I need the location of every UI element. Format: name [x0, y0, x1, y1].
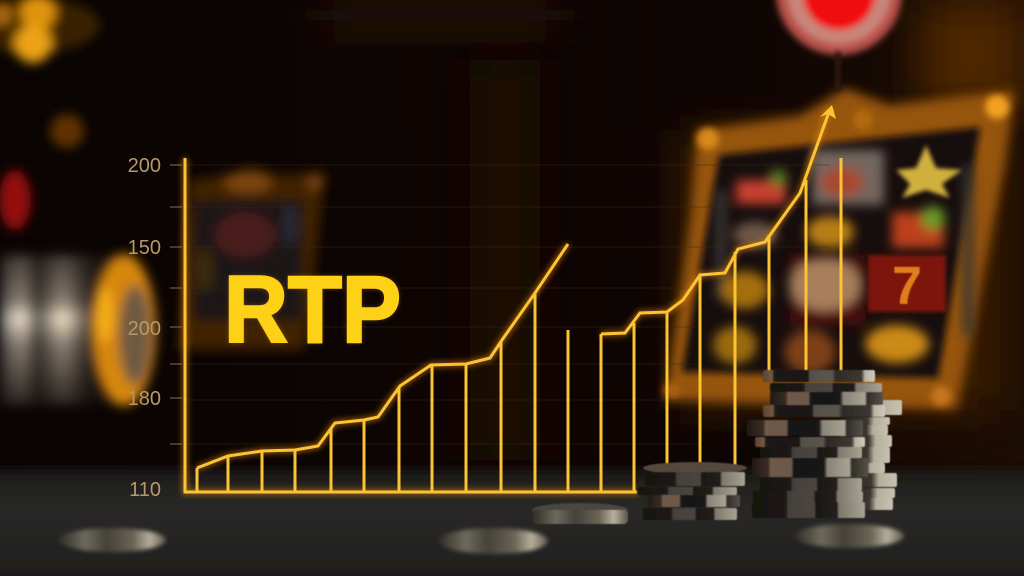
y-axis labels: 150: [128, 237, 161, 259]
seven tile: [868, 255, 946, 312]
machine frame: [665, 88, 1015, 410]
chart axes: [185, 158, 640, 492]
top-left bokeh lights: [0, 0, 100, 230]
flat chip: [532, 503, 628, 524]
y-axis labels: 200: [128, 318, 161, 340]
y-axis labels: [128, 155, 161, 501]
star symbol: [896, 145, 962, 198]
grid lines: [185, 165, 830, 444]
trend line right with arrow: [601, 105, 836, 334]
RTP heading: RTP: [224, 257, 401, 363]
y-axis labels: 200: [128, 155, 161, 177]
reel symbols: [713, 150, 973, 374]
left blurred slot machine: [178, 166, 325, 350]
blurred foreground chips: [58, 524, 904, 554]
short chip stack: [637, 462, 747, 520]
bars: [197, 158, 841, 492]
tall chip stack: [747, 370, 885, 518]
background glow and pillars: [320, 0, 1024, 460]
top red poker chip: [776, 0, 902, 55]
chip stem: [835, 52, 841, 90]
trend line left: [197, 244, 568, 468]
back chip stack: [840, 400, 902, 510]
frame lights: [664, 95, 1009, 406]
left blurred coin: [0, 254, 156, 406]
y-axis labels: 180: [128, 388, 161, 410]
machine screen: [682, 127, 980, 378]
axis tick marks: [170, 165, 182, 444]
table surface: [0, 470, 1024, 576]
RTP heading: RTP: [224, 257, 401, 363]
lucky seven symbol: 7: [892, 256, 922, 316]
line chart glow: [185, 108, 829, 492]
right blurred slot machine: [664, 88, 1015, 410]
y-axis labels: 110: [129, 479, 161, 501]
